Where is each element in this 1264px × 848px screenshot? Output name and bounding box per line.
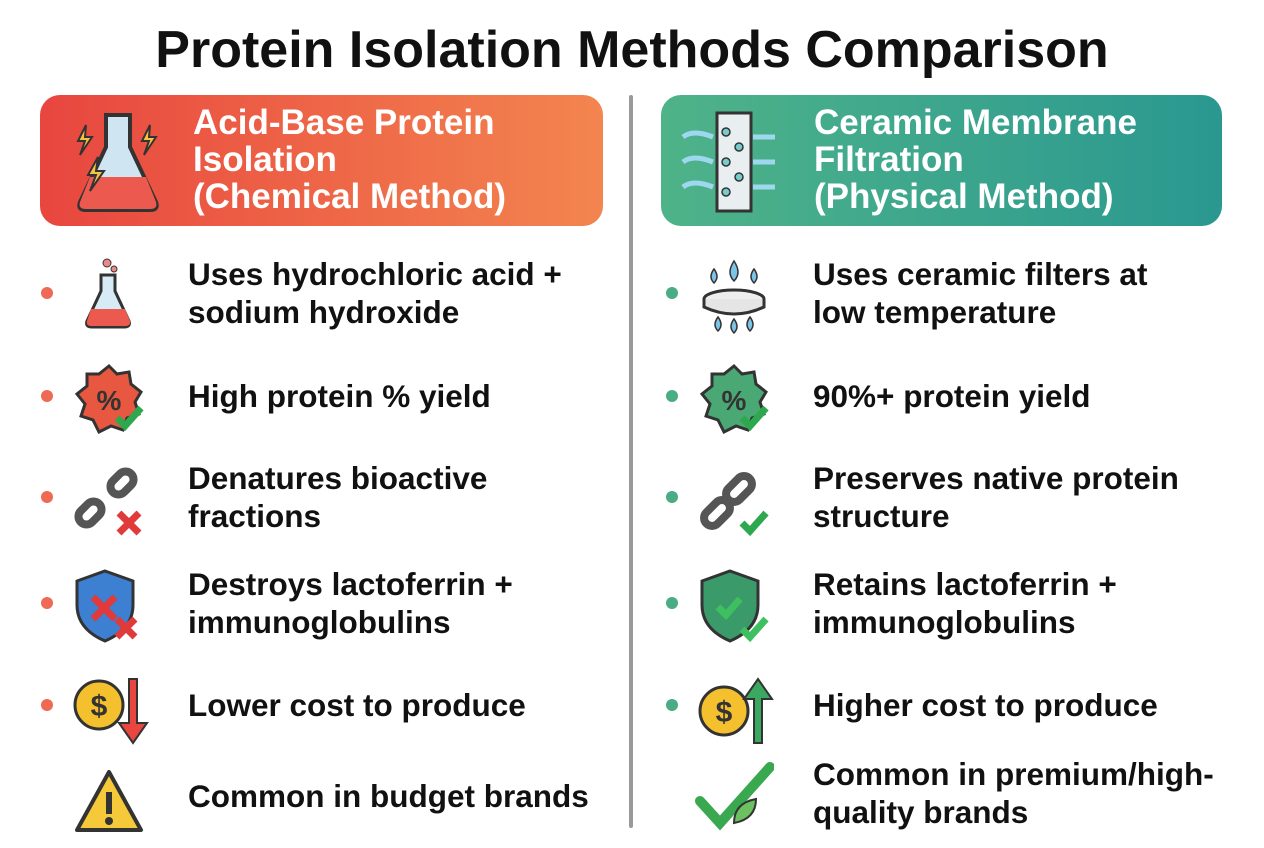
row: premium brands: Common in premium/high- [813, 756, 1214, 792]
row: denatures: Denatures bioactive [188, 460, 487, 496]
divider [629, 95, 633, 828]
row: budget brands: Common in budget brands [188, 778, 589, 814]
row: higher cost [666, 677, 1158, 744]
row: destroys: Destroys lactoferrin + [188, 566, 513, 602]
row: higher cost: $ [716, 696, 733, 729]
row: denatures: fractions [188, 498, 321, 534]
row: lower cost [41, 678, 526, 745]
icon: flask with lightning [76, 113, 159, 212]
row: 90% yield [666, 364, 1090, 434]
panel header: acid-base: Acid-Base Protein [193, 103, 494, 142]
row: retains: immunoglobulins [813, 604, 1075, 640]
panel header: ceramic membrane: Filtration [814, 140, 964, 179]
icon: membrane filter [682, 112, 775, 212]
right list [666, 256, 1214, 830]
row: destroys [41, 566, 513, 643]
row: hydrochloric acid: Uses hydrochloric acid + [188, 256, 562, 292]
row: hydrochloric acid: sodium hydroxide [188, 294, 459, 330]
row: hydrochloric acid [41, 256, 562, 330]
row: premium brands [695, 756, 1214, 830]
panel header: acid-base: (Chemical Method) [193, 177, 506, 216]
row: preserves [666, 460, 1179, 536]
row: lower cost: $ [91, 690, 108, 723]
row: preserves: structure [813, 498, 950, 534]
row: yield: % [97, 385, 122, 416]
panel header: ceramic membrane: (Physical Method) [814, 177, 1113, 216]
row: yield [41, 364, 491, 434]
row: preserves: Preserves native protein [813, 460, 1179, 496]
row: ceramic filters [666, 256, 1148, 334]
title: Protein Isolation Methods Comparison [155, 21, 1109, 79]
left list [41, 256, 589, 832]
row: budget brands [75, 770, 589, 832]
panel header: ceramic membrane: Ceramic Membrane [814, 103, 1137, 142]
row: 90% yield: 90%+ protein yield [813, 378, 1090, 414]
panel header: acid-base: Isolation [193, 140, 337, 179]
row: yield: High protein % yield [188, 378, 491, 414]
row: denatures [41, 460, 487, 536]
panel header: ceramic membrane [661, 95, 1222, 226]
row: higher cost: Higher cost to produce [813, 687, 1158, 723]
row: 90% yield: % [722, 385, 747, 416]
row: premium brands: quality brands [813, 794, 1028, 830]
row: retains: Retains lactoferrin + [813, 566, 1117, 602]
panel header: acid-base [40, 95, 603, 226]
row: ceramic filters: Uses ceramic filters at [813, 256, 1147, 292]
row: destroys: immunoglobulins [188, 604, 450, 640]
row: retains [666, 566, 1117, 643]
row: ceramic filters: low temperature [813, 294, 1056, 330]
row: lower cost: Lower cost to produce [188, 687, 526, 723]
